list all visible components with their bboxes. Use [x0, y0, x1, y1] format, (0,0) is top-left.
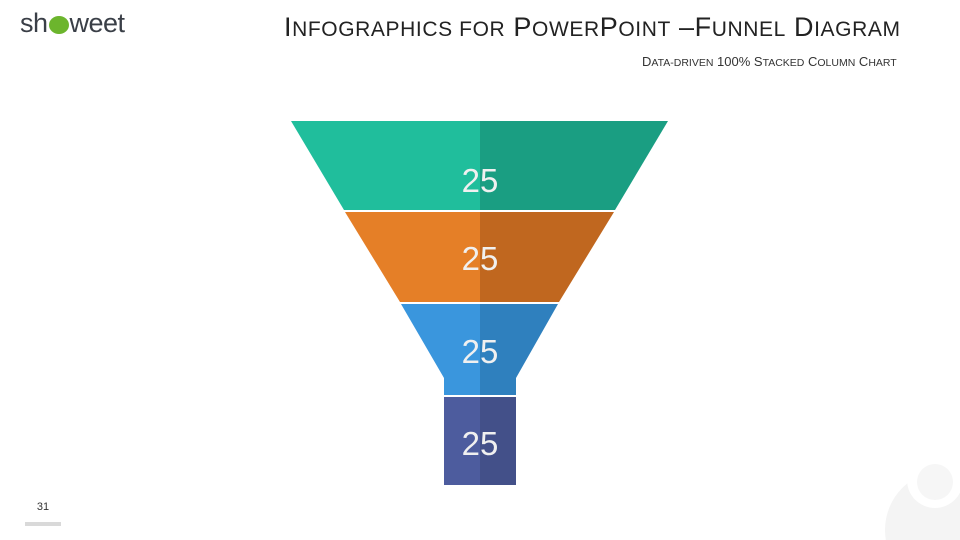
page number — [25, 495, 61, 526]
page number: 31 — [37, 501, 49, 513]
title: INFOGRAPHICS FOR POWERPOINT –FUNNEL DIAGRAM — [284, 12, 901, 42]
segment 1 teal: 25 — [462, 162, 498, 199]
watermark logo — [885, 452, 960, 540]
segment 3 blue — [401, 304, 558, 395]
segment 4 purple — [444, 397, 516, 485]
segment 3 blue: 25 — [462, 333, 498, 370]
segment 4 purple: 25 — [462, 425, 498, 462]
logo: sh weet — [20, 8, 125, 38]
segment 2 orange — [345, 212, 614, 302]
segment 2 orange: 25 — [462, 240, 498, 277]
segment 1 teal — [291, 121, 668, 210]
subtitle: DATA-DRIVEN 100% STACKED COLUMN CHART — [642, 54, 897, 69]
